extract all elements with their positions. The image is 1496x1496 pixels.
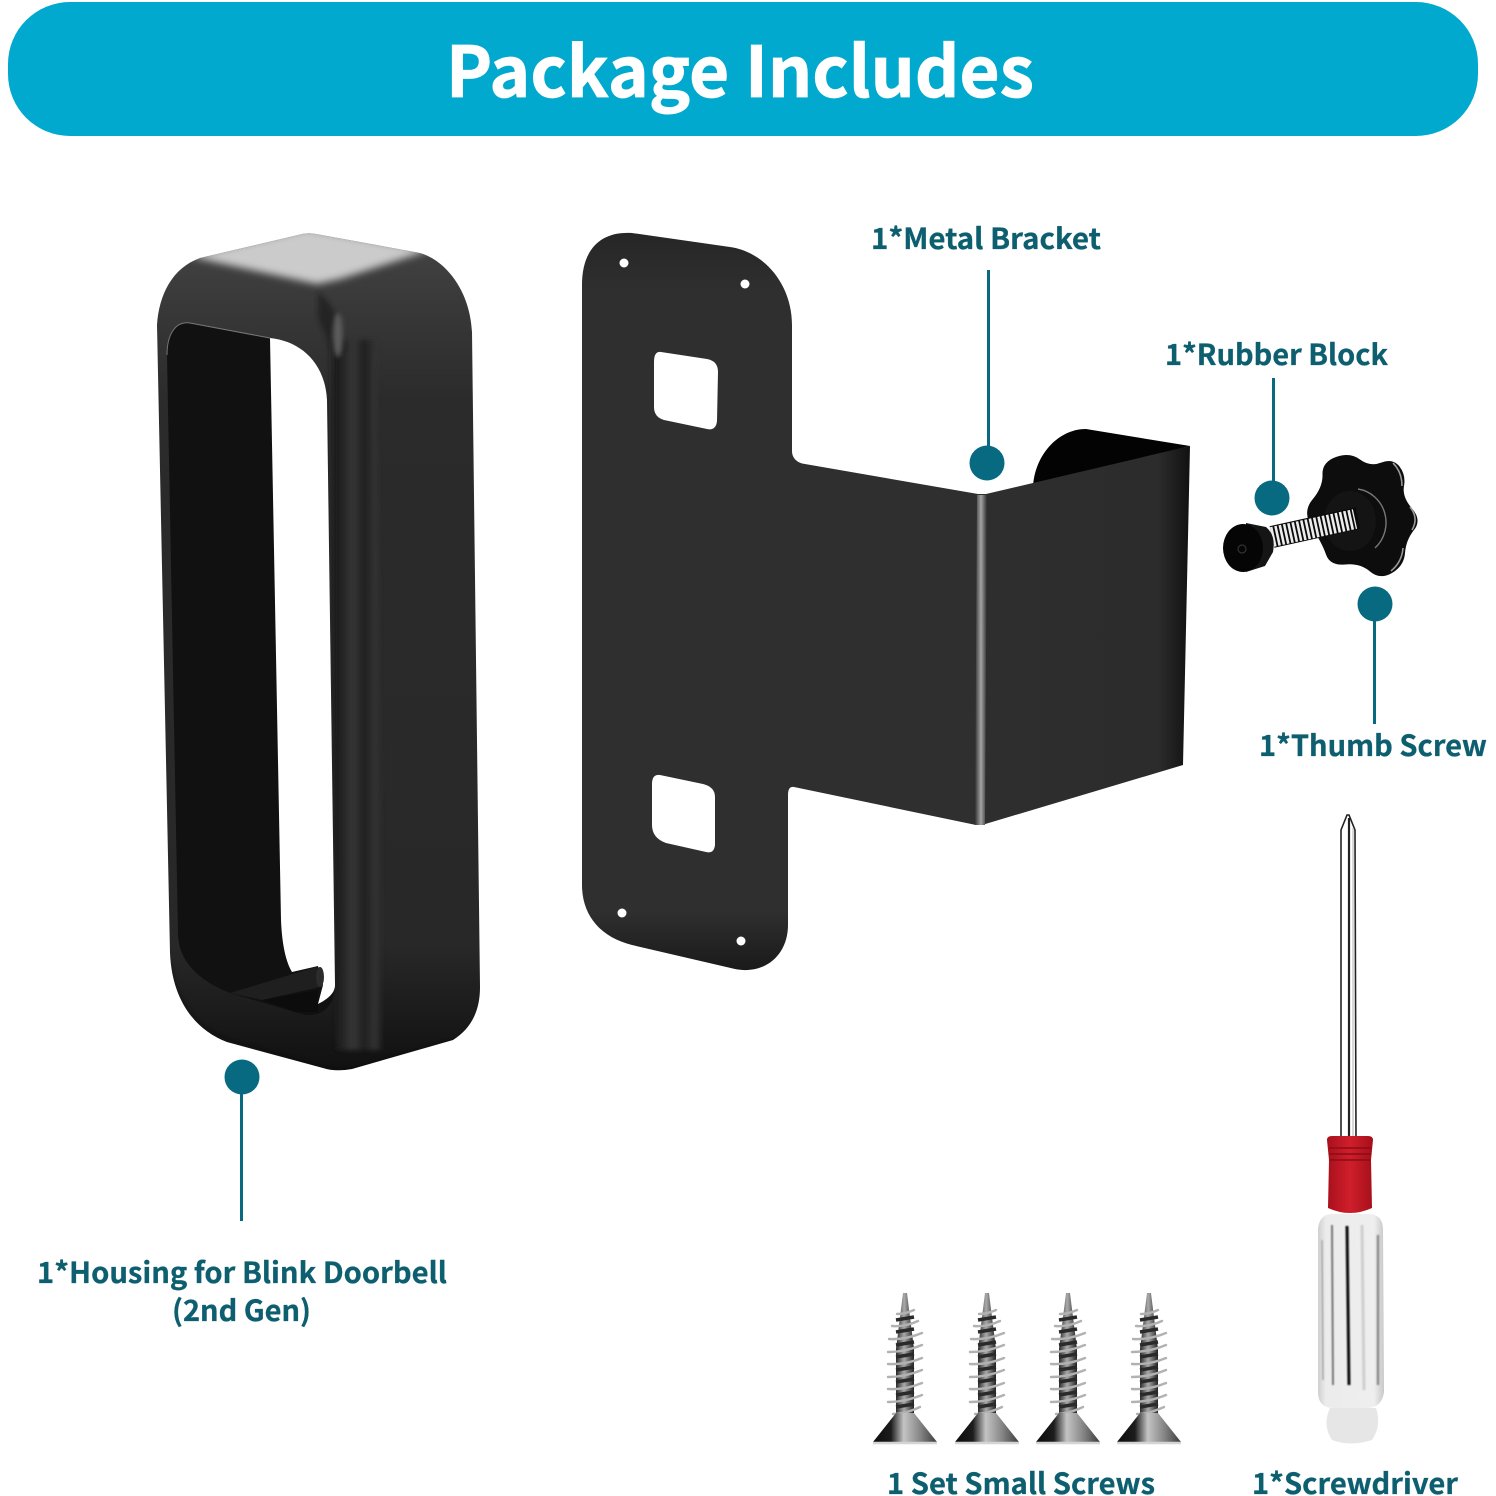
header banner: [8, 2, 1478, 136]
label: housing: [37, 1250, 447, 1330]
screw 1: [873, 1293, 937, 1443]
marker: rubber block callout: [1254, 378, 1290, 516]
product: screwdriver: [1318, 815, 1384, 1444]
label: thumb screw: 1*Thumb Screw: [1259, 723, 1487, 765]
product: doorbell housing: [157, 228, 480, 1075]
title: Package Includes: [446, 17, 1034, 118]
label: rubber block: 1*Rubber Block: [1165, 332, 1388, 374]
product: small screws: [873, 1293, 1181, 1443]
marker: bracket callout: [970, 270, 1004, 480]
product: thumb screw: [1223, 455, 1418, 576]
label: housing: (2nd Gen): [172, 1288, 311, 1330]
screw 3: [1036, 1293, 1100, 1443]
marker: housing callout: [224, 1060, 260, 1221]
screw 4: [1117, 1293, 1181, 1443]
marker: thumb screw callout: [1358, 586, 1392, 724]
product: metal bracket: [582, 233, 1190, 970]
label: housing: 1*Housing for Blink Doorbell: [37, 1250, 447, 1292]
screw 2: [955, 1293, 1019, 1443]
label: metal bracket: 1*Metal Bracket: [871, 216, 1101, 258]
